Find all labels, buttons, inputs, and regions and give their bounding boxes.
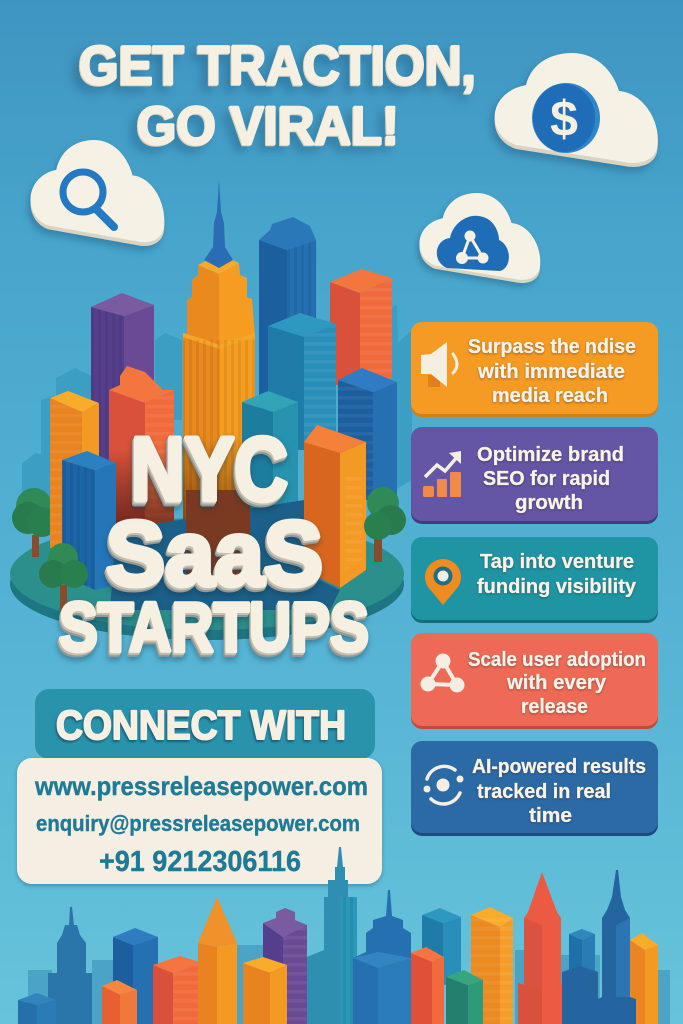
tree left [12, 488, 57, 557]
text: Tap into venture [480, 551, 634, 573]
icon: cloud with magnifier [31, 140, 164, 246]
icon: cloud with network [419, 193, 540, 283]
website: www.pressreleasepower.com [34, 771, 368, 801]
building: orange short [243, 957, 287, 1024]
text [477, 551, 637, 598]
building: red [153, 956, 203, 1024]
building: red right [330, 269, 392, 385]
text [477, 444, 624, 514]
text: SEO for rapid [483, 468, 610, 490]
text: AI-powered results [472, 756, 646, 778]
panel: AI results [411, 741, 658, 836]
building: blue stepped [353, 890, 411, 1024]
building: green [446, 970, 483, 1024]
text: Optimize brand [477, 444, 624, 466]
panel: media reach [411, 322, 658, 417]
text: Surpass the ndise [468, 336, 636, 358]
heading: NYC SaaS Startups: SaaS [106, 503, 323, 605]
building: purple [263, 908, 307, 1024]
panel: brand SEO [411, 427, 658, 524]
email: enquiry@pressreleasepower.com [36, 811, 360, 836]
faded skyline [28, 945, 670, 1024]
heading: NYC SaaS Startups: STARTUPS [59, 588, 369, 666]
building: blue right [338, 368, 397, 500]
text [472, 756, 646, 827]
building: blue tower [259, 217, 316, 420]
building: teal box [422, 908, 461, 985]
heading: NYC SaaS Startups [59, 420, 369, 666]
text: Scale user adoption [468, 649, 646, 671]
building: teal mid [268, 313, 336, 450]
building: orange small [102, 980, 137, 1024]
panel: venture funding [411, 537, 658, 623]
icon: megaphone [421, 342, 457, 387]
platform [10, 518, 404, 640]
phone: +91 9212306116 [99, 846, 301, 878]
text [468, 649, 646, 718]
text: growth [515, 492, 583, 514]
building: orange front right [304, 425, 366, 588]
building: orange right [630, 933, 658, 1024]
panel: user adoption [411, 633, 658, 729]
icon: network [420, 654, 464, 692]
tree right [364, 487, 406, 562]
heading: NYC SaaS Startups: NYC [131, 420, 288, 520]
shadow behind headline [110, 500, 340, 610]
icon: cloud with dollar: $ [550, 91, 578, 147]
title: get traction, go viral: GO VIRAL! [137, 96, 399, 156]
title: get traction, go viral: GET TRACTION, [79, 34, 476, 96]
text: time [529, 805, 572, 827]
text: media reach [492, 385, 608, 407]
icon: growth chart [423, 451, 461, 497]
building: red stepped [109, 366, 174, 532]
building: blue low left [18, 993, 56, 1024]
text: funding visibility [477, 576, 637, 598]
building: red small [411, 947, 444, 1024]
text [468, 336, 636, 407]
city illustration [10, 180, 412, 640]
building: teal front [242, 391, 298, 532]
building: orange left [50, 391, 99, 548]
text: tracked in real [477, 781, 611, 803]
building: teal tower [307, 847, 357, 1024]
building: blue box [562, 929, 598, 1024]
faded background buildings [22, 305, 412, 530]
building: red spire [518, 872, 567, 1024]
building: empire state orange [183, 180, 255, 546]
icon: tracking target [424, 766, 464, 804]
text: release [521, 696, 588, 718]
building: purple [91, 293, 154, 470]
tree front [39, 543, 88, 611]
title: get traction, go viral [79, 34, 476, 156]
icon: location pin [425, 559, 461, 605]
building: blue cube [113, 928, 158, 1024]
text: with immediate [477, 361, 625, 383]
building: blue tower right [598, 870, 636, 1024]
bottom skyline [18, 847, 670, 1024]
building: orange big [471, 907, 513, 1024]
panel: connect with header: CONNECT WITH [56, 702, 346, 748]
text: with every [506, 672, 607, 694]
icon: cloud with dollar [495, 53, 658, 167]
panel: connect with header [35, 689, 375, 759]
building: blue front left [62, 451, 116, 590]
panel: contact card [17, 758, 382, 884]
building: orange spire [198, 897, 237, 1024]
building: blue spire left [48, 907, 92, 1024]
